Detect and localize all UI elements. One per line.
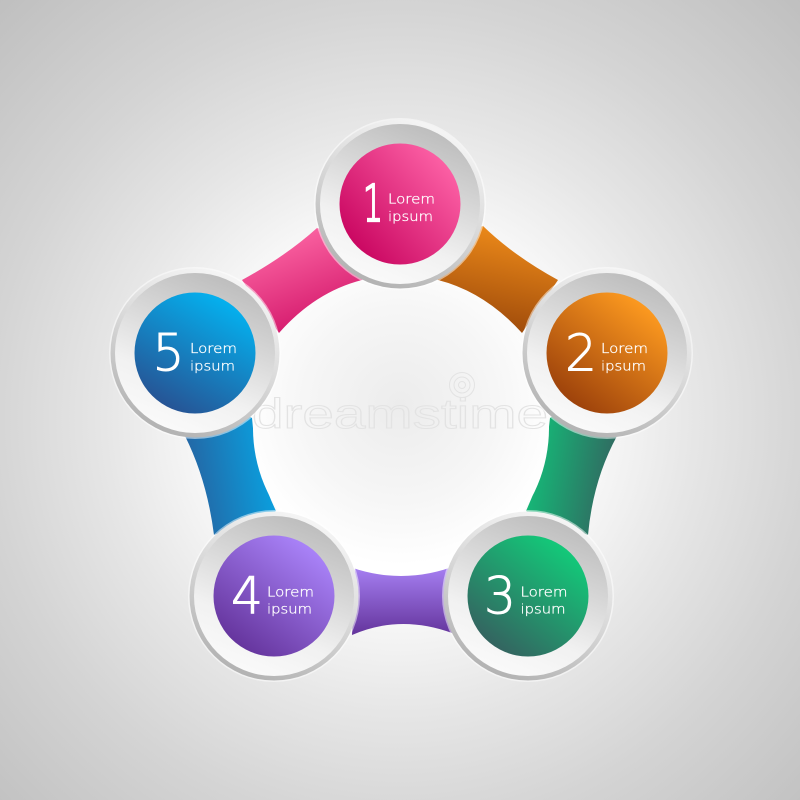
connector: blue (185, 380, 276, 535)
face (527, 273, 687, 433)
connector: orange (400, 226, 558, 333)
node 4 (188, 510, 360, 682)
connector: pink (242, 228, 400, 333)
disc (134, 292, 256, 414)
label: Lorem (267, 584, 314, 600)
halo (109, 267, 281, 439)
node 5 (109, 267, 281, 439)
label: ipsum (190, 358, 235, 374)
rim (316, 120, 484, 288)
connector: green (526, 380, 617, 535)
number: 4 (231, 568, 263, 626)
label: Lorem (190, 341, 237, 357)
node 3 (442, 510, 614, 682)
halo (521, 267, 693, 439)
disc (214, 536, 334, 656)
node 2 (521, 267, 693, 439)
rim (110, 268, 280, 438)
label: Lorem (520, 584, 568, 600)
label: ipsum (520, 602, 566, 618)
number: 5 (152, 324, 184, 384)
label: Lorem (601, 341, 648, 357)
halo (314, 118, 486, 290)
central circle (253, 280, 549, 576)
watermark (252, 372, 548, 437)
number: 2 (565, 324, 597, 384)
node 1 (314, 118, 486, 290)
disc (340, 144, 460, 264)
disc (468, 536, 588, 656)
disc (546, 292, 668, 414)
rim (444, 512, 612, 680)
label: ipsum (601, 358, 646, 374)
number: 3 (484, 568, 516, 626)
face (194, 516, 354, 676)
connector: purple (352, 565, 452, 635)
number: 1 (363, 175, 383, 234)
watermark text: dreamstime (252, 390, 548, 437)
face (115, 273, 275, 433)
watermark spiral icon (450, 372, 474, 398)
halo (442, 510, 614, 682)
rim (522, 268, 692, 438)
label: Lorem (388, 192, 435, 208)
rim (190, 512, 358, 680)
label: ipsum (267, 602, 312, 618)
halo (188, 510, 360, 682)
label: ipsum (388, 209, 433, 225)
face (448, 516, 608, 676)
face (320, 124, 480, 284)
